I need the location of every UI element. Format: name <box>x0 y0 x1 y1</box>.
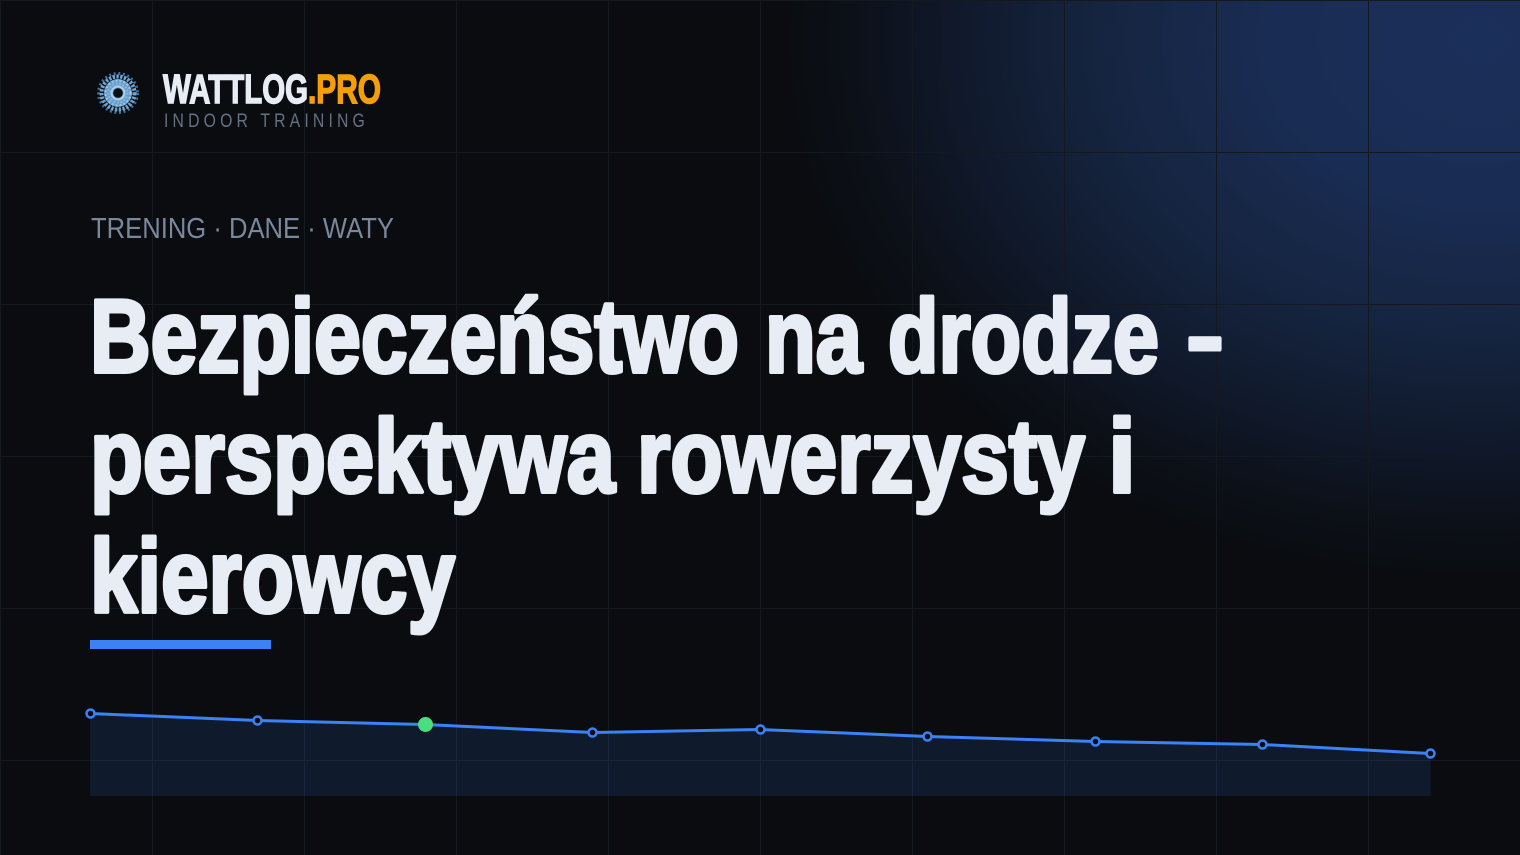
title: perspektywa <box>90 399 616 515</box>
logo <box>98 66 381 132</box>
title underline accent <box>90 640 271 649</box>
title <box>90 279 1222 635</box>
eyebrow text: TRENING · DANE · WATY <box>91 213 394 245</box>
line chart <box>86 710 1434 796</box>
title: Bezpieczeństwo <box>90 279 739 395</box>
title: kierowcy <box>90 519 455 635</box>
brand name: .PRO <box>308 66 381 112</box>
icon: cassette gear <box>98 74 138 112</box>
chart line <box>90 714 1430 754</box>
title: – <box>1188 279 1222 395</box>
highlighted data point <box>418 717 433 732</box>
title: na <box>765 279 863 395</box>
brand name: WATTLOG <box>163 66 308 112</box>
chart area fill <box>90 714 1430 796</box>
title: drodze <box>888 279 1159 395</box>
title: rowerzysty <box>637 399 1085 515</box>
tagline: INDOOR TRAINING <box>164 111 369 132</box>
data points <box>86 710 1434 758</box>
title: i <box>1108 399 1136 515</box>
